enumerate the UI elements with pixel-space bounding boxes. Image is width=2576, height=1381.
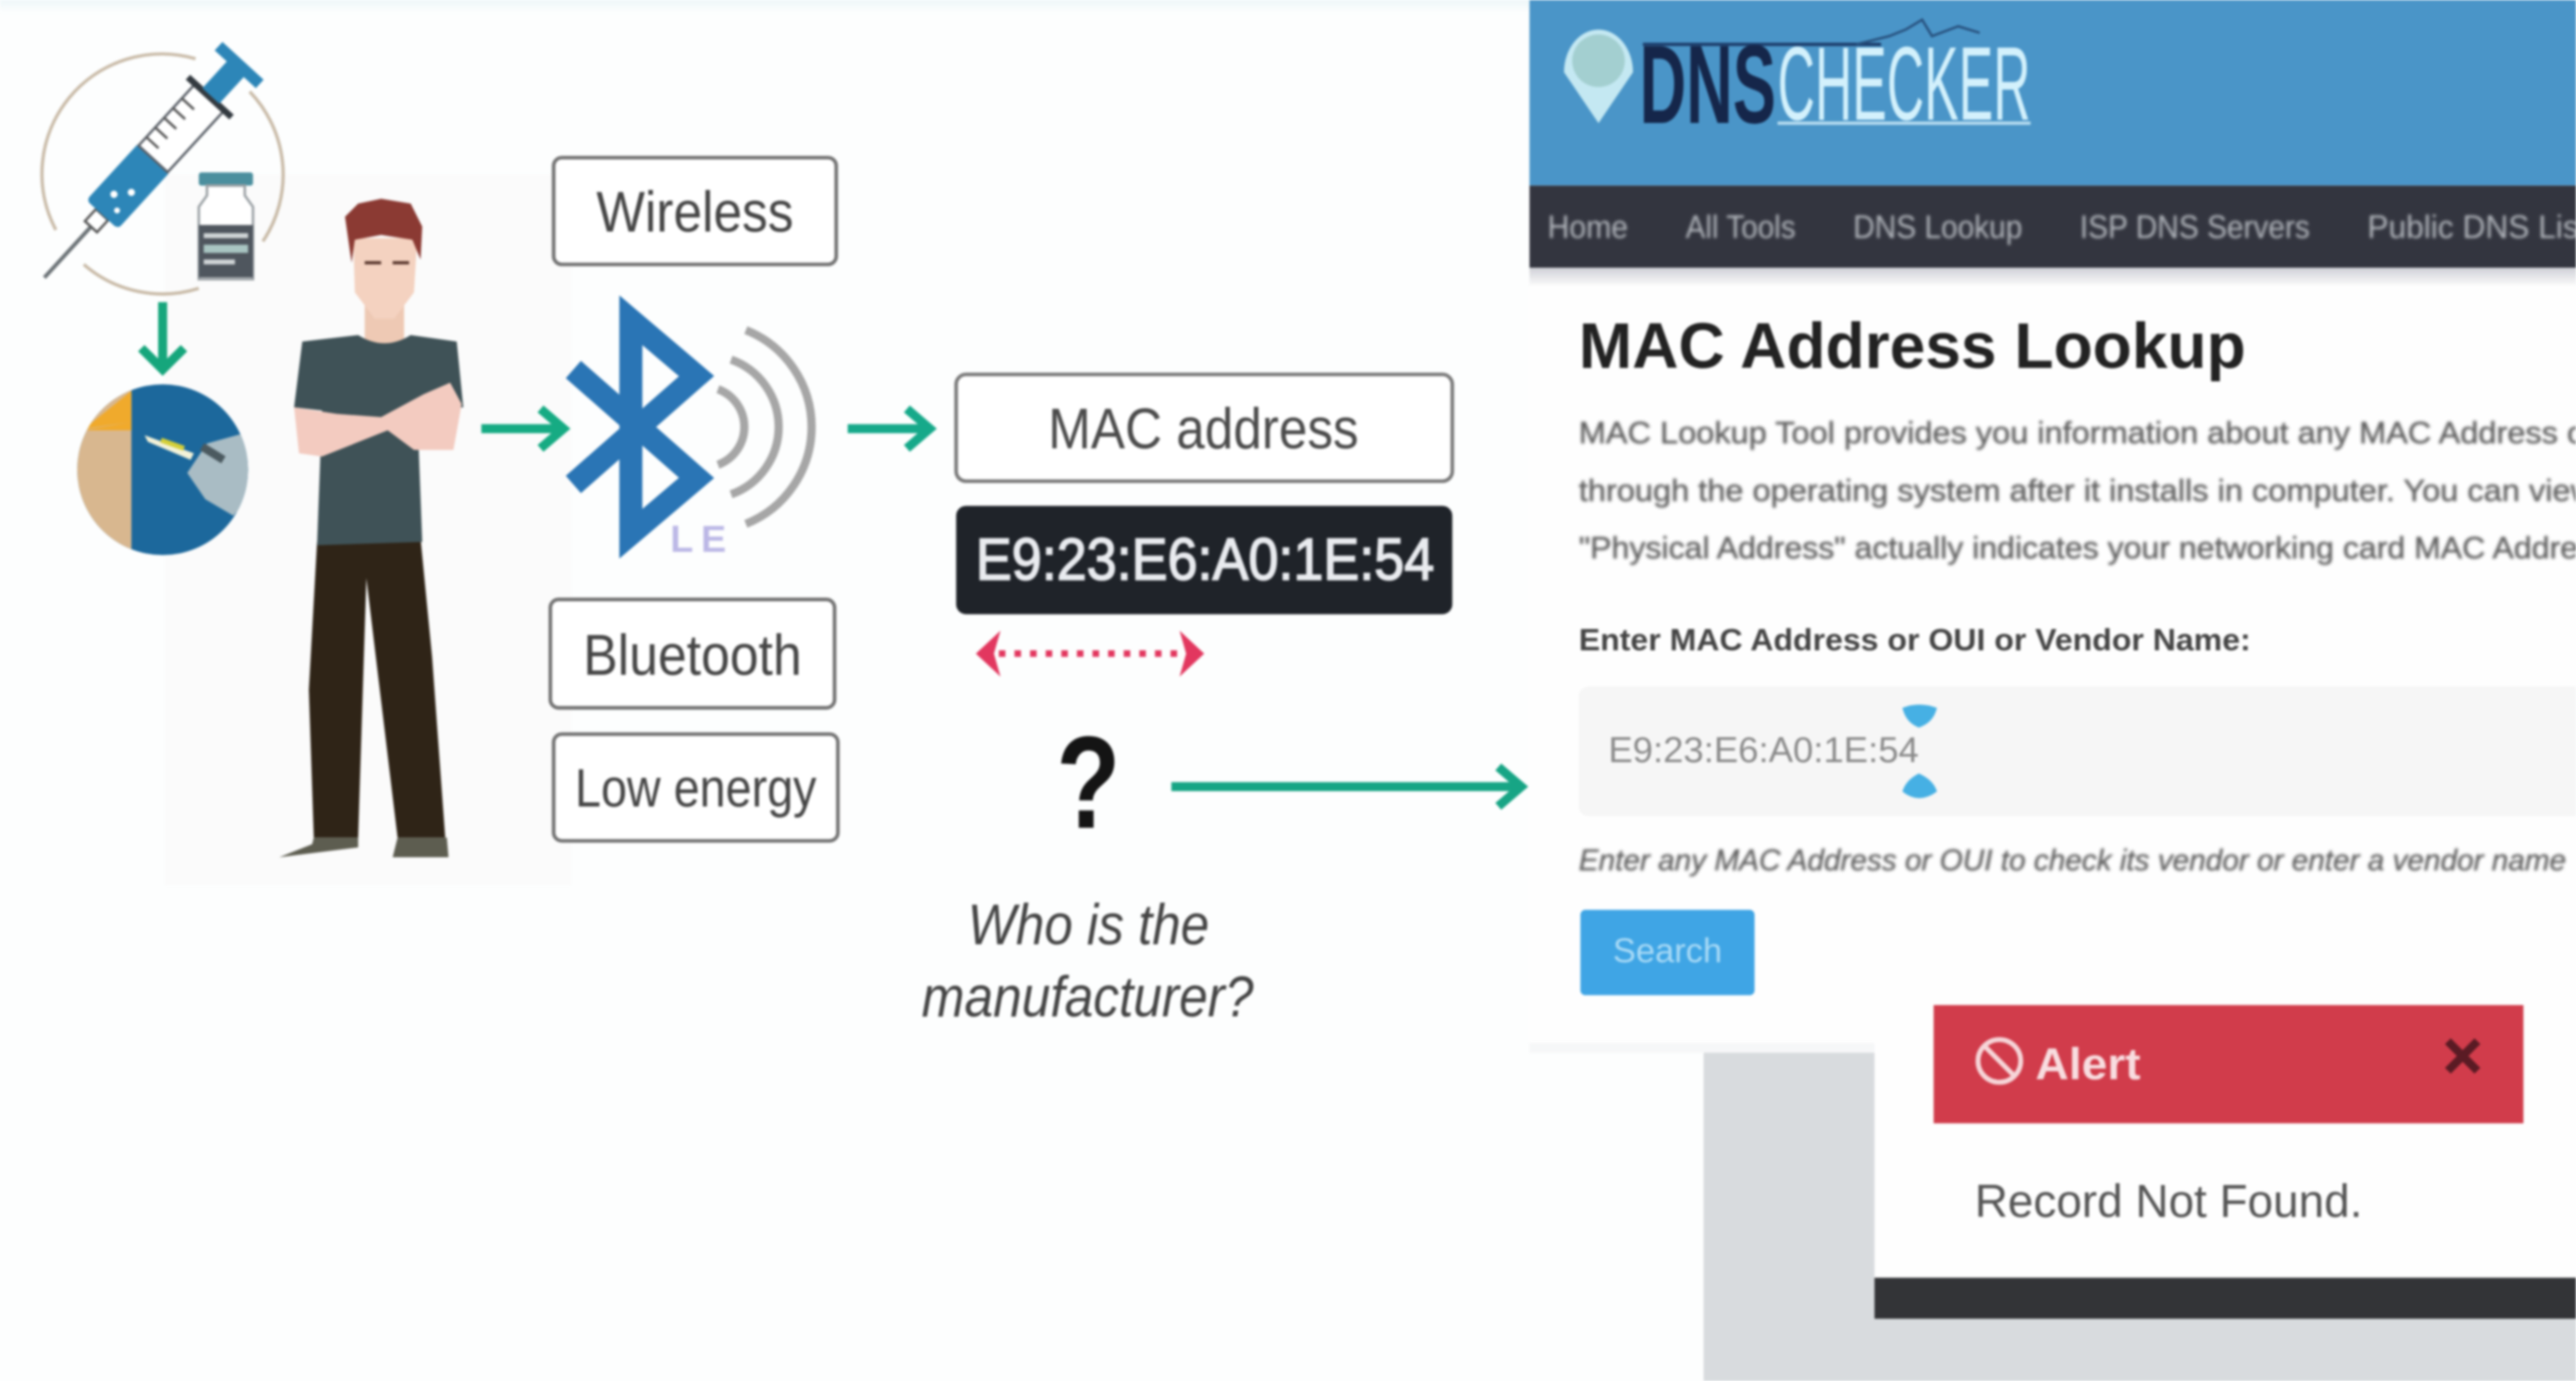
- panel: person backdrop: [165, 174, 571, 886]
- label: Wireless: [554, 158, 836, 264]
- navigation bar: [1529, 186, 2576, 268]
- label: Wireless: Wireless: [596, 181, 793, 245]
- navigation bar: ISP DNS Servers: [2079, 209, 2310, 246]
- icon: Bluetooth low energy: [573, 320, 812, 560]
- MAC address value: E9:23:E6:A0:1E:54: [975, 526, 1434, 593]
- navigation bar: All Tools: [1686, 209, 1796, 246]
- site header: [1529, 0, 2576, 186]
- label: MAC address: [956, 374, 1453, 482]
- intro paragraph: MAC Lookup Tool provides you information about any MAC Address of: [1578, 416, 2576, 451]
- arrow: syringe to arm: [141, 302, 184, 370]
- label: Low energy: [554, 734, 838, 841]
- question text: [922, 894, 1254, 1030]
- arrow: man to Bluetooth: [482, 409, 563, 448]
- panel: alert dialog: [1874, 1005, 2576, 1319]
- MAC address value: [956, 506, 1453, 614]
- alert header: Alert: [2035, 1040, 2141, 1089]
- search button: Search: [1613, 931, 1723, 970]
- alert message: Record Not Found.: [1975, 1176, 2362, 1228]
- label: Bluetooth: Bluetooth: [583, 624, 802, 688]
- input field: [1578, 687, 2576, 816]
- page heading: MAC Address Lookup: [1578, 310, 2246, 382]
- navigation bar: DNS Lookup: [1853, 209, 2022, 246]
- intro paragraph: [1578, 416, 2576, 566]
- icon: question mark: ?: [1056, 709, 1121, 856]
- input label: Enter MAC Address or OUI or Vendor Name:: [1578, 623, 2251, 658]
- icon: syringe and vial: [22, 41, 283, 298]
- icon: injection in arm: [74, 381, 254, 562]
- label: Bluetooth: [550, 599, 835, 708]
- logo: DNS Checker: DNS: [1639, 22, 1776, 147]
- icon: prohibited sign: [1978, 1040, 2020, 1082]
- arrow: to lookup tool: [1171, 767, 1521, 806]
- question text: manufacturer?: [922, 966, 1254, 1030]
- label: Low energy: Low energy: [575, 758, 817, 818]
- logo: DNS Checker: [1564, 19, 2030, 147]
- arrow: manufacturer prefix span: [975, 630, 1204, 677]
- navigation bar: Home: [1548, 209, 1628, 246]
- illustration: man with crossed arms: [279, 199, 463, 857]
- intro paragraph: "Physical Address" actually indicates your networking card MAC Addres: [1578, 531, 2576, 566]
- arrow: Bluetooth to MAC address: [848, 409, 930, 448]
- panel: grey page background: [1704, 1045, 2576, 1381]
- icon: close: [2447, 1041, 2477, 1070]
- label: MAC address: MAC address: [1049, 397, 1358, 461]
- input hint: Enter any MAC Address or OUI to check its vendor or enter a vendor name: [1578, 844, 2566, 877]
- question text: Who is the: [968, 894, 1209, 958]
- panel: lookup web page: [1529, 0, 2576, 1053]
- intro paragraph: through the operating system after it installs in computer. You can view: [1578, 473, 2576, 508]
- site header: CHECKER: [1777, 26, 2030, 143]
- icon: Bluetooth low energy: LE: [670, 518, 726, 560]
- input field: E9:23:E6:A0:1E:54: [1608, 730, 1919, 770]
- search button: [1580, 910, 1755, 996]
- alert header: [1933, 1005, 2523, 1123]
